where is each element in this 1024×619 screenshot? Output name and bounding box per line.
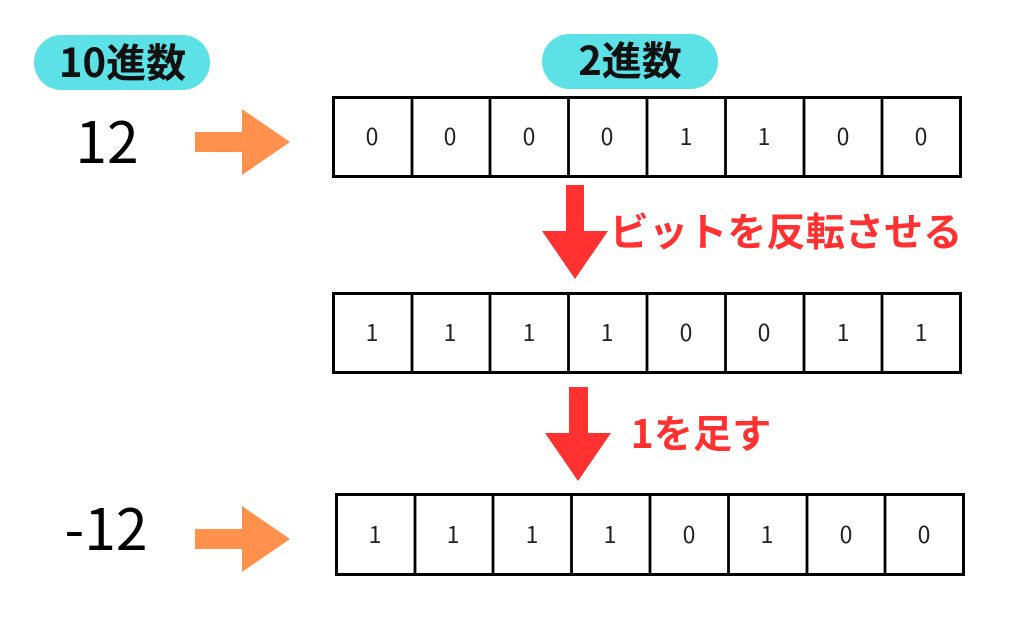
binary row: -12: 0 [840,516,852,550]
binary row: -12: 1 [369,516,381,550]
binary row: 12: 0 [523,118,535,152]
arrow: -12 to binary [195,506,290,572]
binary row: inverted: 1 [366,314,378,348]
binary row: 12: 0 [366,118,378,152]
number: 12: 12 [75,98,139,180]
binary row: inverted: 0 [758,314,770,348]
binary row: -12: 1 [604,516,616,550]
binary row: inverted: 1 [523,314,535,348]
binary row: inverted [334,293,960,373]
heading: binary pill: 2進数 [578,29,682,87]
heading: decimal pill: 10進数 [59,31,186,89]
binary row: -12 [336,494,964,575]
arrow: invert bits [542,185,608,279]
binary row: 12: 1 [758,118,770,152]
binary row: 12: 1 [680,118,692,152]
label: add one: 1を足す [631,404,771,460]
binary row: 12 [334,97,960,177]
binary row: -12: 0 [683,516,695,550]
binary row: inverted: 0 [680,314,692,348]
label: invert bits: ビットを反転させる [610,202,962,258]
number: -12: -12 [64,485,148,567]
arrow: add one [545,387,611,481]
binary row: inverted: 1 [601,314,613,348]
binary row: 12: 0 [601,118,613,152]
binary row: -12: 1 [761,516,773,550]
binary row: -12: 0 [918,516,930,550]
binary row: 12: 0 [837,118,849,152]
heading: binary pill [542,29,718,89]
binary row: inverted: 1 [837,314,849,348]
arrow: 12 to binary [195,109,290,175]
binary row: inverted: 1 [444,314,456,348]
binary row: 12: 0 [915,118,927,152]
binary row: inverted: 1 [915,314,927,348]
binary row: 12: 0 [444,118,456,152]
binary row: -12: 1 [447,516,459,550]
binary row: -12: 1 [526,516,538,550]
